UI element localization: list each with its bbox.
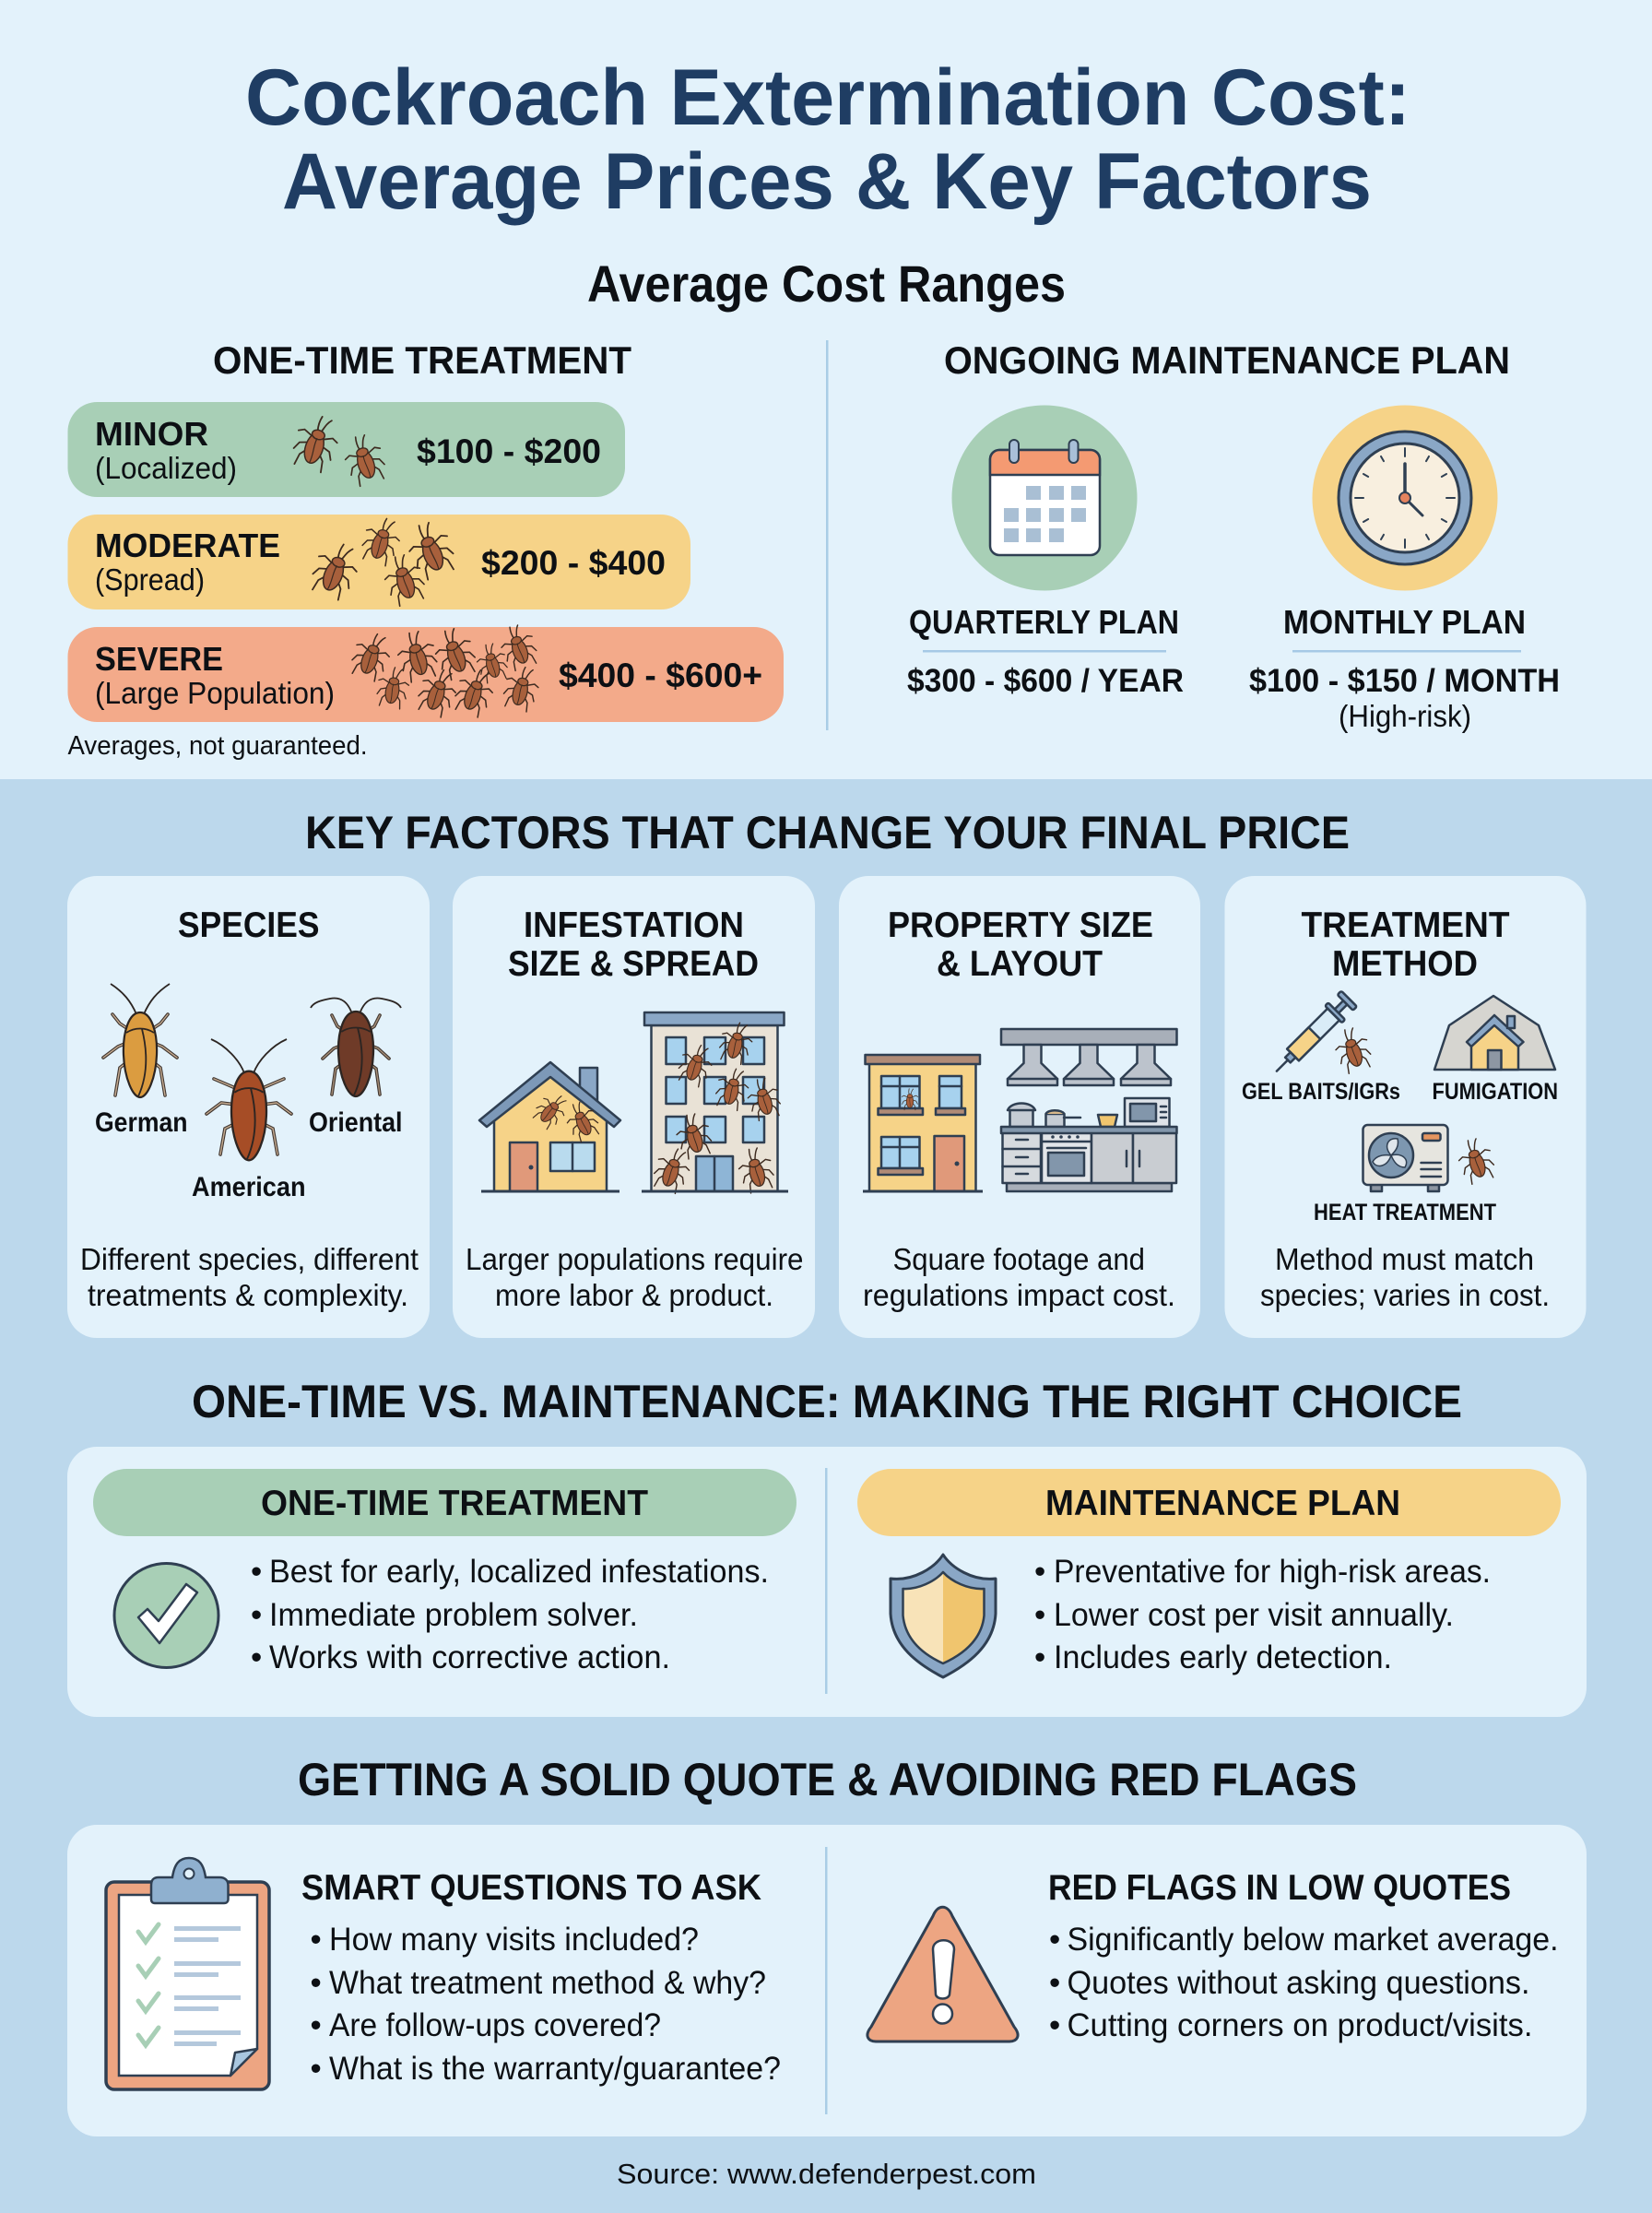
icon: house with roaches [479, 1062, 620, 1191]
column: smart questions: How many visits included? [329, 1922, 699, 1958]
card: treatment method: FUMIGATION [1433, 1079, 1558, 1105]
pill: moderate: MODERATE [95, 527, 280, 564]
icon: clock [1313, 406, 1497, 590]
column: maintenance plan: • [1034, 1639, 1045, 1675]
plan: quarterly: $300 - $600 / YEAR [907, 663, 1184, 699]
heading: average cost ranges: Average Cost Ranges [587, 254, 1066, 313]
column: maintenance plan: Includes early detection. [1054, 1639, 1392, 1675]
panel: comparison [67, 1447, 1587, 1717]
pill: moderate: $200 - $400 [481, 544, 666, 582]
column: smart questions: What treatment method & why? [329, 1965, 766, 2001]
column: red flags [1048, 1868, 1558, 2043]
pill: severe: (Large Population) [95, 676, 335, 710]
card: infestation size and spread [453, 876, 815, 1338]
card: property size and layout: PROPERTY SIZE [888, 905, 1153, 945]
column: smart questions [301, 1868, 781, 2087]
column: one-time treatment: Best for early, localized infestations. [269, 1554, 769, 1590]
plan: monthly: (High-risk) [1339, 699, 1471, 733]
panel: quotes and red flags [67, 1825, 1587, 2136]
card: treatment method: HEAT TREATMENT [1314, 1200, 1496, 1225]
plan: quarterly [907, 603, 1184, 699]
title: Average Prices & Key Factors [282, 137, 1372, 226]
column: red flags: • [1049, 1922, 1060, 1958]
card: treatment method: METHOD [1332, 944, 1478, 984]
title [245, 53, 1410, 226]
icon: german cockroach [103, 984, 177, 1097]
heading: one-time vs maintenance: ONE-TIME VS. MAINTENANCE: MAKING THE RIGHT CHOICE [192, 1376, 1462, 1427]
column: smart questions: • [310, 2051, 322, 2087]
heading: solid quote: GETTING A SOLID QUOTE & AVOIDING RED FLAGS [298, 1754, 1357, 1805]
column: smart questions: What is the warranty/guarantee? [329, 2051, 781, 2087]
card: species: American [192, 1172, 306, 1202]
plan: quarterly: QUARTERLY PLAN [909, 603, 1179, 641]
icon: apartment building with roaches [642, 1012, 788, 1195]
card: treatment method: TREATMENT [1302, 905, 1510, 945]
pill: severe: $400 - $600+ [559, 657, 762, 694]
panel: ongoing maintenance plan [907, 338, 1560, 733]
card: infestation size and spread: more labor & product. [495, 1278, 773, 1312]
card: property size and layout: regulations impact cost. [863, 1278, 1175, 1312]
icon: fumigation tent [1434, 996, 1555, 1070]
card: property size and layout [839, 876, 1200, 1338]
column: maintenance plan: MAINTENANCE PLAN [1045, 1484, 1400, 1523]
column: red flags: Significantly below market average. [1068, 1922, 1558, 1958]
plan: monthly [1249, 603, 1560, 733]
column: smart questions: • [310, 2007, 322, 2043]
card: species: Different species, different [80, 1242, 419, 1276]
column: maintenance plan: • [1034, 1554, 1045, 1590]
column: one-time treatment: Immediate problem solver. [269, 1597, 638, 1633]
pill: moderate [68, 514, 690, 609]
column: red flags: Cutting corners on product/visits. [1068, 2007, 1532, 2043]
icon: bug beside heat unit [1454, 1135, 1498, 1186]
icon: bug beside syringe [1331, 1024, 1375, 1075]
icon: oriental cockroach [311, 999, 401, 1096]
column: red flags: RED FLAGS IN LOW QUOTES [1048, 1868, 1511, 1908]
icon: small building [863, 1055, 983, 1191]
column: maintenance plan: • [1034, 1597, 1045, 1633]
pill: moderate: (Spread) [95, 562, 205, 597]
card: treatment method: species; varies in cost. [1260, 1278, 1550, 1312]
source: Source: www.defenderpest.com [617, 2158, 1036, 2190]
column: red flags: Quotes without asking questions. [1068, 1965, 1530, 2001]
card: infestation size and spread: SIZE & SPREAD [508, 944, 759, 984]
plan: monthly: $100 - $150 / MONTH [1249, 663, 1560, 699]
column: one-time treatment: • [251, 1554, 262, 1590]
icon: commercial kitchen [1001, 1029, 1176, 1191]
column: smart questions: • [310, 1922, 322, 1958]
icon: warning triangle [867, 1907, 1018, 2041]
column: smart questions: Are follow-ups covered? [329, 2007, 661, 2043]
heading: ongoing maintenance plan: ONGOING MAINTENANCE PLAN [944, 338, 1510, 382]
pill: minor: (Localized) [95, 451, 237, 485]
card: infestation size and spread: INFESTATION [524, 905, 744, 945]
column: maintenance plan: Lower cost per visit annually. [1054, 1597, 1454, 1633]
pill: minor [68, 402, 625, 497]
heading: key factors: KEY FACTORS THAT CHANGE YOUR FINAL PRICE [305, 807, 1350, 858]
column: one-time treatment: ONE-TIME TREATMENT [261, 1484, 648, 1523]
card: property size and layout: & LAYOUT [937, 944, 1103, 984]
column: smart questions: SMART QUESTIONS TO ASK [301, 1868, 761, 1908]
background: lower section [0, 779, 1652, 2213]
icon: heat unit [1363, 1125, 1447, 1191]
note: averages: Averages, not guaranteed. [68, 731, 367, 761]
icon: check circle [114, 1564, 218, 1667]
card: species: Oriental [309, 1107, 402, 1138]
card: species [67, 876, 430, 1338]
panel: one-time treatment costs [68, 338, 784, 761]
card: treatment method [1224, 876, 1586, 1338]
card: species: treatments & complexity. [88, 1278, 408, 1312]
icon: syringe [1268, 990, 1358, 1080]
column: maintenance plan: Preventative for high-risk areas. [1054, 1554, 1491, 1590]
background: upper section [0, 0, 1652, 779]
card: treatment method: GEL BAITS/IGRs [1242, 1079, 1400, 1105]
pill: severe [68, 621, 784, 722]
column: red flags: • [1049, 1965, 1060, 2001]
column: one-time treatment: • [251, 1597, 262, 1633]
icon: shield [891, 1555, 996, 1677]
icon: calendar [951, 406, 1138, 590]
card: property size and layout: Square footage and [892, 1242, 1145, 1276]
card: infestation size and spread: Larger populations require [466, 1242, 804, 1276]
title: Cockroach Extermination Cost: [245, 53, 1410, 142]
icon: clipboard [106, 1858, 269, 2089]
pill: minor: $100 - $200 [417, 432, 601, 470]
plan: monthly: MONTHLY PLAN [1283, 603, 1526, 641]
heading: one-time treatment: ONE-TIME TREATMENT [213, 338, 631, 382]
icon: american cockroach [206, 1039, 291, 1160]
column: one-time treatment: Works with corrective action. [269, 1639, 670, 1675]
card: species: SPECIES [178, 905, 319, 945]
column: one-time treatment: • [251, 1639, 262, 1675]
card: treatment method: Method must match [1275, 1242, 1534, 1276]
column: red flags: • [1049, 2007, 1060, 2043]
pill: minor: MINOR [95, 415, 208, 453]
pill: severe: SEVERE [95, 640, 223, 678]
column: one-time treatment [93, 1469, 796, 1675]
column: maintenance plan [857, 1469, 1561, 1677]
card: species: German [95, 1107, 188, 1138]
column: smart questions: • [310, 1965, 322, 2001]
